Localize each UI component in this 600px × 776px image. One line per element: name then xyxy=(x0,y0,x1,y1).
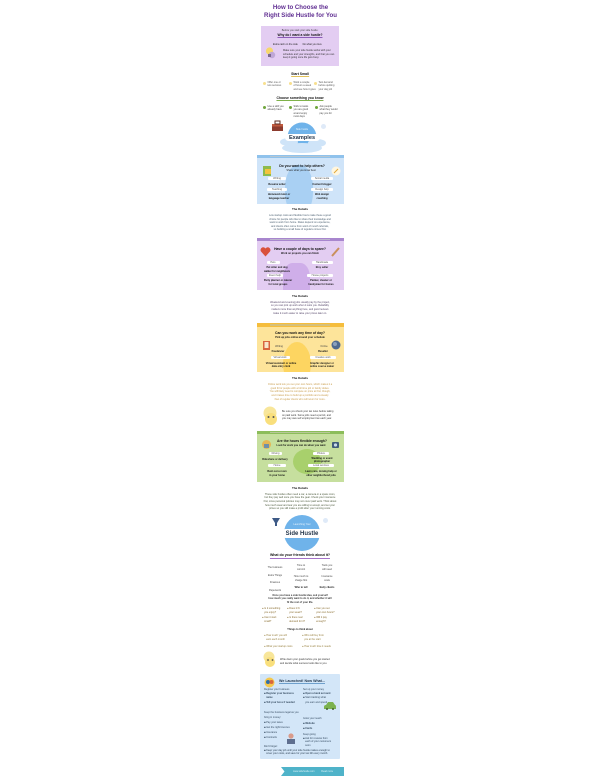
intro text: keep it going once life gets busy. xyxy=(283,56,319,59)
body: first, since personal policies may not cover paid work. Think about xyxy=(264,500,336,503)
icon: notepad xyxy=(332,166,340,176)
panel: blue free time xyxy=(257,155,344,204)
left pills and text: Writing xyxy=(273,177,281,180)
icon: heart xyxy=(260,247,270,256)
icon: badge xyxy=(264,677,275,688)
section: yellow checklist: ● Is there real xyxy=(287,616,302,619)
callout text: and decide what success looks like to you. xyxy=(280,662,327,665)
section: yellow checklist: demand for it? xyxy=(289,620,305,622)
column 3: Tools you xyxy=(322,564,332,567)
body: make it much easier to raise your prices later on. xyxy=(273,312,327,315)
right pills and text xyxy=(307,260,334,286)
label: Side Hustle xyxy=(286,530,318,536)
column 2: How much to xyxy=(294,575,308,578)
icon: sparkle dot xyxy=(323,518,328,523)
heading: Have a couple of days to spare? xyxy=(274,247,326,251)
block: the details 2 xyxy=(270,294,330,315)
right pills and text: Wedding or event xyxy=(312,456,332,460)
right pills and text: Lawn care, moving help or xyxy=(305,470,337,473)
left pills and text: Rideshare or delivery xyxy=(262,458,288,461)
right pills and text: Local services xyxy=(313,464,329,467)
heading: Things to think about xyxy=(287,628,313,631)
subheading: Pick up jobs online around your schedule xyxy=(275,336,325,339)
right pills and text: Web design xyxy=(315,193,329,196)
section: choose something you know xyxy=(263,96,338,118)
right group 1: ■ Start tracking what xyxy=(303,696,326,699)
tip 1: already have xyxy=(268,108,282,111)
body: choice for people who like to share their knowledge and xyxy=(269,218,331,221)
right pills and text: Painter, cleaner or xyxy=(310,279,332,282)
tip 1: Use a skill you xyxy=(268,105,284,108)
right group 2: Grow your reach xyxy=(303,717,321,720)
right pills and text: Social media xyxy=(315,177,329,180)
row two: small? xyxy=(264,620,271,622)
icon: person at desk xyxy=(286,733,296,745)
body: flow of regular clients who will return for more. xyxy=(275,398,325,401)
left group 2: Keep the business legal as you xyxy=(264,711,299,714)
body: Low startup costs and flexible hours make these a good xyxy=(269,214,331,217)
list: ● What your startup costs xyxy=(264,644,292,648)
row one: you enjoy? xyxy=(264,610,276,614)
right pills and text: Online xyxy=(320,345,328,348)
left pills and text: Party planner or caterer xyxy=(264,279,292,282)
centre shape xyxy=(283,342,311,386)
icon: book xyxy=(263,341,270,350)
row one: ● Is it something xyxy=(262,607,280,610)
left pills and text: Writing xyxy=(275,345,283,348)
body: so building a small base of regulars comes first. xyxy=(274,228,326,231)
left pills and text: for local groups xyxy=(269,283,287,286)
left pills and text: Virtual assistant or online xyxy=(266,362,296,364)
body xyxy=(269,214,331,231)
title: Right Side Hustle for You xyxy=(264,12,337,19)
intro heading: Why do I want a side hustle? xyxy=(277,33,323,37)
intro text: Make sure your side hustle works with your xyxy=(283,49,331,52)
right group 1: you earn and spend xyxy=(305,701,327,704)
tip 1 xyxy=(263,81,282,87)
left pills and text xyxy=(262,452,288,477)
kicker: Launching Your xyxy=(293,523,311,526)
column 2: charge first xyxy=(295,579,307,582)
body xyxy=(268,383,332,401)
section: start small xyxy=(263,72,334,91)
heading: The Details xyxy=(292,294,308,298)
column 1: The business xyxy=(268,566,282,569)
left pills and text: Driving xyxy=(272,452,279,455)
right pills and text xyxy=(310,345,336,368)
tip 2: Stick to tasks xyxy=(294,105,308,108)
right pills and text: Content blogger xyxy=(312,182,332,186)
right pills and text: Creative work xyxy=(315,356,331,359)
right group 2: ■ Cards xyxy=(303,727,312,730)
left pills and text: Virtual work xyxy=(273,356,287,359)
column 3: Insurance xyxy=(322,575,332,578)
bottom note: Don't forget: xyxy=(264,745,278,748)
body: prices so you still make a profit after your running costs. xyxy=(269,507,331,510)
list right xyxy=(302,634,331,648)
section: reflect text xyxy=(262,592,338,606)
icon: sparkle dot xyxy=(321,124,326,129)
section: yellow checklist: your week? xyxy=(289,610,302,614)
list: earn each month xyxy=(266,638,285,640)
heading: Can you work any time of day? xyxy=(275,331,325,335)
blue circle xyxy=(270,514,332,552)
column 1: Paperwork xyxy=(269,588,281,592)
subheading: Share what you know best xyxy=(286,169,316,172)
left pills and text: Home xyxy=(274,464,280,467)
body: and clients often come from word of mouth referrals, xyxy=(271,225,329,228)
body: so you can pick up work when it suits you. Reliability xyxy=(271,304,329,307)
body: but they pay well once you have the gear. Check your insurance xyxy=(265,496,335,499)
tip 1: two services xyxy=(268,84,281,87)
title: How to Choose the xyxy=(273,4,328,11)
tip 3: what they would xyxy=(320,108,337,111)
right group 2: ■ Website xyxy=(303,722,315,725)
label: Examples xyxy=(289,134,315,140)
icon: brush xyxy=(331,247,340,257)
icon: funnel xyxy=(271,517,281,527)
panel: legal checklist xyxy=(260,674,340,759)
right pills and text: coaching xyxy=(317,197,327,200)
right pills and text: Graphic designer or xyxy=(310,362,334,364)
callout text xyxy=(280,658,330,665)
tip 3: Ask people xyxy=(320,105,332,108)
centre shape xyxy=(293,449,321,474)
right pills and text: Reseller xyxy=(318,350,328,353)
panel: purple people xyxy=(257,238,344,290)
body xyxy=(264,492,336,511)
right group 3: soon xyxy=(305,744,311,747)
centre shape xyxy=(285,165,313,215)
column 1: Extra Things xyxy=(268,574,282,576)
intro text: schedule and your strengths, and that you can xyxy=(283,53,334,56)
tip 3: before quitting xyxy=(318,84,334,87)
body: Once you have a side hustle idea, ask yourself xyxy=(272,594,328,596)
body: want to work from home. Rates depend on experience, xyxy=(270,221,330,224)
left group 1: ■ Register your business xyxy=(264,692,294,695)
left pills and text: data entry clerk xyxy=(272,365,290,368)
tip 3: pay you for xyxy=(320,112,332,115)
top strip xyxy=(257,323,344,327)
column 2 xyxy=(294,564,308,590)
right pills and text: Etsy seller xyxy=(316,266,328,269)
tip callout: yellow face 2 xyxy=(262,650,338,670)
icon: spreadsheet xyxy=(263,166,271,176)
callout text xyxy=(282,410,334,420)
list right: ● Who will buy from xyxy=(302,634,324,637)
icon: face blob xyxy=(264,406,277,425)
icon: sun badge xyxy=(262,440,271,449)
kicker: Side hustle xyxy=(296,128,308,131)
section: yellow checklist xyxy=(261,606,339,624)
left group 2: ■ Get the right licences xyxy=(264,726,290,729)
right pills and text: House projects xyxy=(312,274,328,277)
heading: Are the hours flexible enough? xyxy=(277,438,327,442)
body: Online work lets you set your own hours, which makes it a xyxy=(268,383,332,386)
tip 2 xyxy=(289,105,308,118)
callout text: you may owe self employment tax each year. xyxy=(282,417,332,420)
callout text: on paid work. Some jobs need a permit, and xyxy=(282,414,331,417)
right pills and text: Design help xyxy=(315,188,329,191)
icon: toolbox xyxy=(272,120,283,131)
icon: camera xyxy=(332,442,339,448)
block: the details 1 xyxy=(269,206,331,231)
subheading: Work on projects you can finish xyxy=(281,252,319,255)
right group 1 xyxy=(303,688,330,705)
right pills and text xyxy=(305,452,337,477)
right group 3: each of your customers xyxy=(305,740,331,743)
body xyxy=(270,300,330,315)
heading: The Details xyxy=(292,206,308,210)
section: yellow checklist: enough? xyxy=(316,620,326,622)
section: yellow checklist: ● Does it fit xyxy=(287,607,300,610)
block: the details 3 xyxy=(268,376,332,401)
column 1: Finances xyxy=(270,581,280,584)
section: yellow checklist: your own hours? xyxy=(316,610,335,614)
left pills and text xyxy=(267,177,290,200)
left group 1 xyxy=(264,688,295,705)
block: the details 4 xyxy=(264,486,336,510)
your side hustle badge xyxy=(270,514,332,552)
body: how much you really want to do it, and whether it will xyxy=(268,597,332,600)
tip 2: Work a couple xyxy=(294,81,309,84)
icon: globe xyxy=(332,340,340,350)
heading: Start Small xyxy=(291,72,309,76)
right group 3: Keep going xyxy=(303,733,316,736)
bottom note xyxy=(264,745,330,756)
tip 2: at and enjoy xyxy=(294,112,307,115)
panel: green xyxy=(257,431,344,482)
right group 3 xyxy=(303,733,331,747)
intro options: Extra cash on the side Do what you love xyxy=(273,43,322,46)
right pills and text: photographer xyxy=(314,460,330,463)
body: how much wear and tear you are willing to accept, and set your xyxy=(265,504,335,507)
left pills and text: Pet sitter and dog xyxy=(266,266,288,269)
centre shape xyxy=(283,263,310,305)
tip 1: Offer one or xyxy=(268,81,281,84)
tip 1 xyxy=(263,105,284,111)
tip 3: your day job xyxy=(318,88,332,91)
section: yellow checklist: ● Can you set xyxy=(314,607,330,610)
section: consider list xyxy=(262,627,338,647)
tip 2: you are good xyxy=(294,108,308,111)
left pills and text: Teaching xyxy=(272,188,282,191)
blue circle with cloud xyxy=(280,122,326,153)
callout text: Be sure you check your tax rules before taking xyxy=(282,410,333,413)
top strip xyxy=(257,431,344,434)
column 3 xyxy=(320,564,334,590)
right pills and text: Handmade xyxy=(316,260,328,264)
left pills and text: Event help xyxy=(269,274,281,277)
icon: face blob xyxy=(263,650,277,668)
left group 2 xyxy=(264,710,299,740)
right pills and text: Photos xyxy=(317,452,325,455)
subheading: Look for work you can do when you want xyxy=(276,444,326,446)
left pills and text: Pets xyxy=(270,260,276,264)
right group 3: ■ Ask for reviews from xyxy=(303,737,328,740)
column 3: Early clients xyxy=(320,586,334,589)
right pills and text xyxy=(311,177,333,200)
left pills and text: walker for neighbours xyxy=(264,270,290,273)
tip 2: of hours a week xyxy=(294,84,311,87)
left pills and text xyxy=(264,260,292,286)
left pills and text: in your home xyxy=(269,474,285,477)
column 2: commit xyxy=(297,568,305,571)
tip 2: and see how it goes xyxy=(294,88,316,91)
body: These side hustles often need a car, a camera or a spare room, xyxy=(265,492,335,496)
list right: ● How much time it needs xyxy=(302,644,331,648)
title xyxy=(264,4,337,19)
section: what do you need xyxy=(262,552,338,592)
callout text: Write down your goals before you get started xyxy=(280,658,330,661)
icon: lightbulb xyxy=(266,47,276,58)
right pills and text: handyman for homes xyxy=(308,283,334,286)
body: You will likely need to compete on price at first, though, xyxy=(270,390,330,393)
column 3: costs xyxy=(324,579,330,582)
tip 2: most days xyxy=(294,115,305,118)
list right: you at the start xyxy=(304,638,321,640)
panel: yellow xyxy=(257,323,344,372)
column 3: will need xyxy=(322,568,332,571)
intro text xyxy=(283,49,334,59)
bottom note: ■ Keep your day job until your side hustle makes enough to xyxy=(264,749,330,752)
list xyxy=(264,634,292,648)
left pills and text xyxy=(266,345,296,368)
tip 2 xyxy=(289,81,316,91)
left group 2: bring in money: xyxy=(264,716,281,719)
left pills and text: Resume writer xyxy=(268,182,286,186)
left group 1: Register your business xyxy=(264,688,289,691)
tip 3: Test demand xyxy=(318,81,333,84)
left pills and text: Rent out a room xyxy=(267,470,287,473)
row one xyxy=(262,607,280,614)
body: good fit for people with a full time job or family duties. xyxy=(271,387,329,390)
section: yellow checklist: ● Will it pay xyxy=(314,616,327,619)
left pills and text: Freelancer xyxy=(272,350,284,353)
bottom note: cover your costs, and save for your tax bill every month. xyxy=(266,752,328,755)
left group 1: ■ Tell your boss if needed xyxy=(264,701,295,704)
list: ● How much you will xyxy=(264,634,287,637)
body: matters more than anything here, and good reviews xyxy=(271,308,329,311)
tip callout: yellow face xyxy=(264,406,334,425)
examples badge xyxy=(272,120,326,153)
left group 2: ■ Contracts xyxy=(264,736,277,739)
heading: The Details xyxy=(292,486,308,490)
left group 2: ■ Pay your taxes xyxy=(264,721,283,724)
body xyxy=(268,594,332,605)
left group 2: ■ Insurance xyxy=(264,731,277,734)
tip 3 xyxy=(315,105,338,115)
row two xyxy=(262,616,276,623)
body: fit the rest of your life. xyxy=(287,601,313,604)
icon: car xyxy=(323,701,337,710)
top strip xyxy=(257,155,344,158)
heading: The Details xyxy=(292,376,308,380)
body: and it takes time to build up a portfolio and a steady xyxy=(271,394,329,397)
right group 1: Set up your money xyxy=(303,688,324,691)
heading: Choose something you know xyxy=(276,96,324,100)
tip 3 xyxy=(314,81,334,91)
heading: We Launched! Now What... xyxy=(279,679,325,683)
heading: What do your friends think about it? xyxy=(270,553,330,557)
right pills and text: online course maker xyxy=(310,365,334,368)
panel: intro xyxy=(261,26,339,66)
left pills and text: Homework tutor or xyxy=(268,193,290,196)
top strip xyxy=(257,238,344,241)
body: Weekend and evening jobs usually pay by the project, xyxy=(270,300,330,304)
row two: ● Can it start xyxy=(262,616,276,619)
intro kicker: Before you start your side hustle: xyxy=(282,29,318,32)
right pills and text: other neighborhood jobs xyxy=(306,474,336,477)
column 1 xyxy=(268,564,282,594)
left group 1: name xyxy=(266,696,273,699)
right group 1: ■ Open a bank account xyxy=(303,692,330,695)
right group 2 xyxy=(303,716,321,731)
column 2: Who to tell xyxy=(295,586,307,589)
heading: Do you want to help others? xyxy=(279,164,325,168)
column 2: Time to xyxy=(297,564,305,567)
left pills and text: language teacher xyxy=(269,197,289,200)
footer text: www.sidehustle.com Read more xyxy=(293,770,333,773)
footer banner xyxy=(281,767,344,776)
